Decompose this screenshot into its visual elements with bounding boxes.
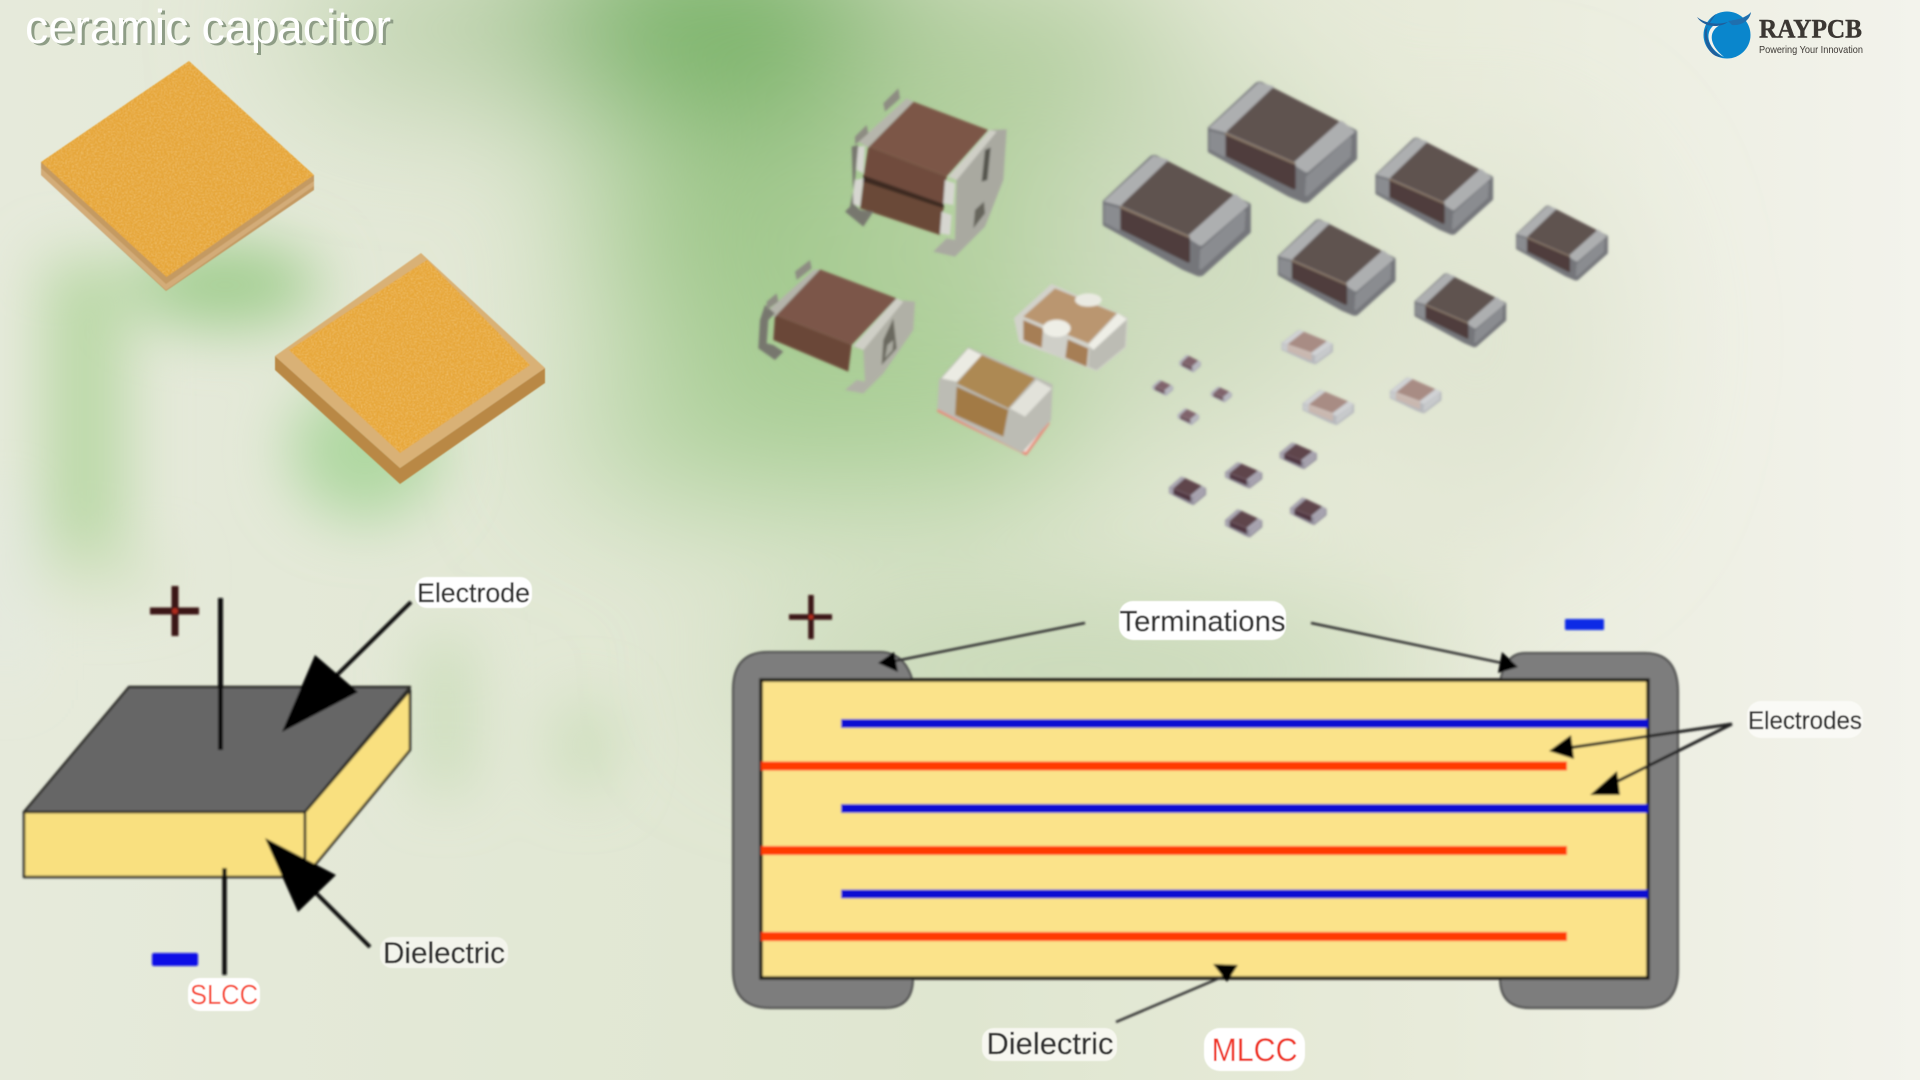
logo: RayPCB: RAYPCB	[1759, 14, 1862, 44]
SLCC photo chip: bevelled edge	[275, 253, 545, 484]
clip-lead capacitor: single	[758, 260, 915, 393]
title: ceramic capacitor	[28, 2, 394, 55]
top lead wire	[218, 598, 223, 750]
terminations	[733, 652, 1678, 1008]
arrow: dielectric	[1116, 964, 1238, 1022]
MLCC photo chips	[758, 84, 1605, 537]
arrow: dielectric	[265, 838, 370, 947]
pale small chips	[1282, 331, 1440, 424]
grey MLCC chips	[1106, 84, 1605, 346]
icon: minus terminal	[1565, 619, 1604, 630]
arrow: electrode	[282, 602, 411, 732]
tiny chips	[1153, 355, 1231, 425]
icon: minus terminal	[152, 953, 198, 966]
label: Dielectric (MLCC): Dielectric	[986, 1027, 1114, 1061]
label: SLCC: SLCC	[190, 979, 258, 1010]
title: ceramic capacitor	[25, 0, 391, 53]
icon: plus terminal	[150, 586, 199, 636]
label: Electrode: Electrode	[417, 578, 530, 608]
logo: RayPCB: Powering Your Innovation	[1759, 44, 1863, 56]
icon: logo globe	[1697, 12, 1751, 58]
panel: MLCC diagram	[733, 595, 1732, 1022]
arrows: electrodes	[1549, 724, 1732, 795]
slab body	[24, 687, 410, 877]
arrow: right termination	[1311, 623, 1518, 673]
label: Dielectric (SLCC): Dielectric	[383, 937, 505, 970]
label: MLCC: MLCC	[1212, 1032, 1298, 1068]
bottom lead wire	[222, 868, 227, 975]
logo: RayPCB	[1697, 12, 1863, 58]
small dark chips	[1170, 443, 1325, 537]
red electrodes	[761, 762, 1567, 941]
SLCC photo chip: plain edge	[41, 61, 314, 291]
label: Terminations: Terminations	[1120, 606, 1286, 638]
arrow: left termination	[878, 623, 1085, 672]
label: Electrodes: Electrodes	[1748, 707, 1862, 735]
icon: plus terminal	[789, 595, 832, 639]
blue electrodes	[841, 719, 1648, 898]
notched tan capacitor	[1015, 285, 1127, 370]
panel: SLCC diagram	[24, 586, 411, 975]
clip-lead capacitor: stacked	[845, 88, 1007, 257]
dielectric body	[761, 680, 1648, 978]
tan capacitor on pad	[938, 348, 1052, 454]
